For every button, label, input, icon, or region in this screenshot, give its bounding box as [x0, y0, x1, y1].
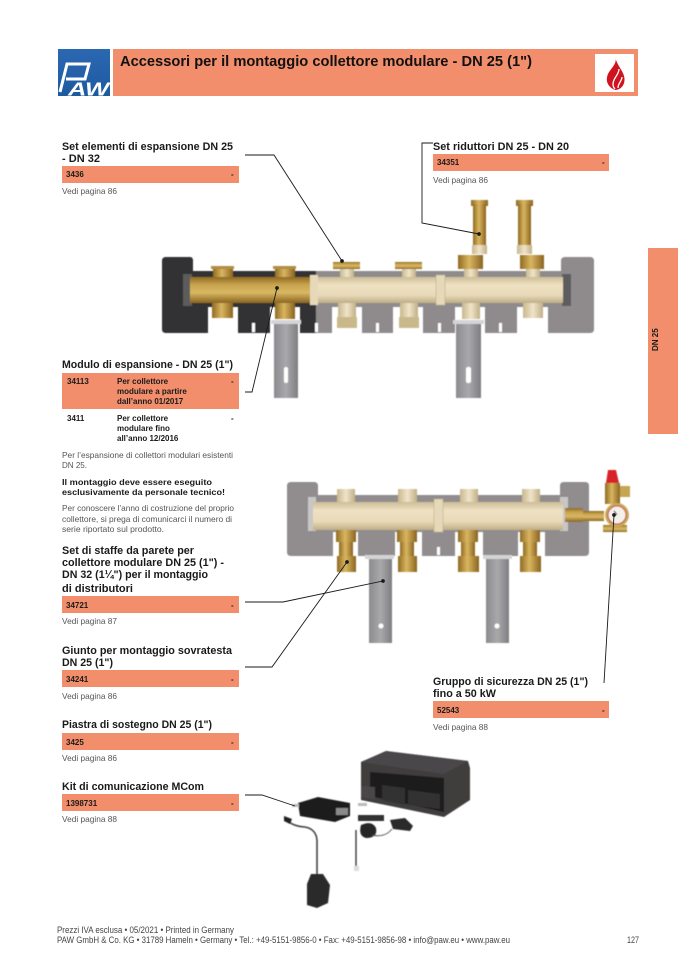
panel: set elementi di espansione: - DN 32 [62, 153, 100, 165]
panel: modulo di espansione: all’anno 12/2016 [117, 434, 179, 443]
panel: modulo di espansione: 3411 [67, 414, 85, 423]
panel: modulo di espansione: modulare fino [117, 424, 170, 433]
panel: set di staffe: Set di staffe da parete per [62, 545, 195, 557]
panel: set di staffe: - [231, 601, 234, 610]
panel: modulo di espansione: Il montaggio deve essere eseguito [62, 478, 212, 487]
logo: PAW: AW [67, 80, 112, 100]
panel: modulo di espansione: Per l’espansione di collettori modulari esistenti [62, 450, 233, 460]
panel: set di staffe: di distributori [62, 583, 133, 595]
panel: giunto: 34241 [66, 675, 89, 684]
panel: set riduttori: Set riduttori DN 25 - DN 20 [433, 141, 569, 153]
panel: modulo di espansione: serie riportato sul prodotto. [62, 524, 164, 534]
panel: modulo di espansione: DN 25. [62, 460, 87, 470]
panel: set di staffe: DN 32 (1¼") per il montaggio [62, 569, 208, 581]
panel: set di staffe: 34721 [66, 601, 89, 610]
leader lines [245, 143, 615, 806]
panel: set elementi di espansione: Set elementi di espansione DN 25 [62, 141, 233, 153]
page number: 127 [627, 935, 639, 945]
panel: modulo di espansione: dall’anno 01/2017 [117, 397, 184, 406]
panel: piastra: - [231, 738, 234, 747]
panel: kit MCom: Kit di comunicazione MCom [62, 781, 204, 793]
panel: kit MCom: - [231, 799, 234, 808]
panel: gruppo di sicurezza: Vedi pagina 88 [433, 722, 488, 732]
panel: set di staffe [62, 545, 239, 626]
panel: set riduttori: Vedi pagina 86 [433, 175, 488, 185]
panel: piastra [62, 719, 239, 763]
panel: modulo di espansione: collettore, si prega di comunicarci il numero di [62, 514, 232, 524]
panel: modulo di espansione: Per collettore [117, 414, 169, 423]
logo: PAW [58, 49, 112, 100]
icon: flame [595, 54, 634, 92]
panel: giunto [62, 645, 239, 701]
panel: modulo di espansione: Modulo di espansione - DN 25 (1") [62, 359, 233, 371]
panel: modulo di espansione: 34113 [67, 377, 89, 386]
panel: piastra: Vedi pagina 86 [62, 753, 117, 763]
panel: set elementi di espansione [62, 141, 239, 196]
panel: modulo di espansione: modulare a partire [117, 387, 187, 396]
panel: kit MCom: 1398731 [66, 799, 98, 808]
side tab: DN 25 [648, 248, 678, 434]
panel: set riduttori: - [602, 158, 605, 167]
panel: modulo di espansione [62, 359, 239, 534]
footer: PAW GmbH & Co. KG • 31789 Hameln • Germany • Tel.: +49-5151-9856-0 • Fax: +49-5151-9856-98 • info@paw.eu • www.paw.eu [57, 935, 510, 945]
footer [57, 925, 639, 945]
panel: giunto: Vedi pagina 86 [62, 691, 117, 701]
panel: gruppo di sicurezza [433, 676, 609, 732]
panel: set elementi di espansione: Vedi pagina 86 [62, 186, 117, 196]
panel: modulo di espansione: Per collettore [117, 377, 169, 386]
manifold lower illustration [287, 470, 630, 643]
side tab: DN 25: DN 25 [651, 328, 660, 351]
panel: kit MCom [62, 781, 239, 824]
panel: giunto: Giunto per montaggio sovratesta [62, 645, 233, 657]
MCom kit illustration [284, 751, 470, 908]
panel: piastra: 3425 [66, 738, 84, 747]
panel: set riduttori [433, 141, 609, 185]
panel: modulo di espansione: - [231, 414, 234, 423]
panel: set di staffe: collettore modulare DN 25 (1") - [62, 557, 224, 569]
panel: gruppo di sicurezza: fino a 50 kW [433, 688, 497, 700]
header bar [113, 49, 638, 96]
panel: piastra: Piastra di sostegno DN 25 (1") [62, 719, 212, 731]
panel: gruppo di sicurezza: Gruppo di sicurezza DN 25 (1") [433, 676, 588, 688]
panel: giunto: DN 25 (1") [62, 657, 113, 669]
panel: set elementi di espansione: 3436 [66, 170, 84, 179]
panel: kit MCom: Vedi pagina 88 [62, 814, 117, 824]
panel: set di staffe: Vedi pagina 87 [62, 616, 117, 626]
title: Accessori per il montaggio collettore modulare - DN 25 (1") [120, 54, 532, 70]
panel: gruppo di sicurezza: - [602, 706, 605, 715]
footer: Prezzi IVA esclusa • 05/2021 • Printed in Germany [57, 925, 235, 935]
panel: set elementi di espansione: - [231, 170, 234, 179]
manifold upper illustration [162, 200, 594, 398]
panel: gruppo di sicurezza: 52543 [437, 706, 460, 715]
panel: modulo di espansione: esclusivamente da personale tecnico! [62, 488, 225, 497]
panel: giunto: - [231, 675, 234, 684]
panel: modulo di espansione: - [231, 377, 234, 386]
panel: modulo di espansione: Per conoscere l’anno di costruzione del proprio [62, 503, 234, 513]
panel: set riduttori: 34351 [437, 158, 460, 167]
